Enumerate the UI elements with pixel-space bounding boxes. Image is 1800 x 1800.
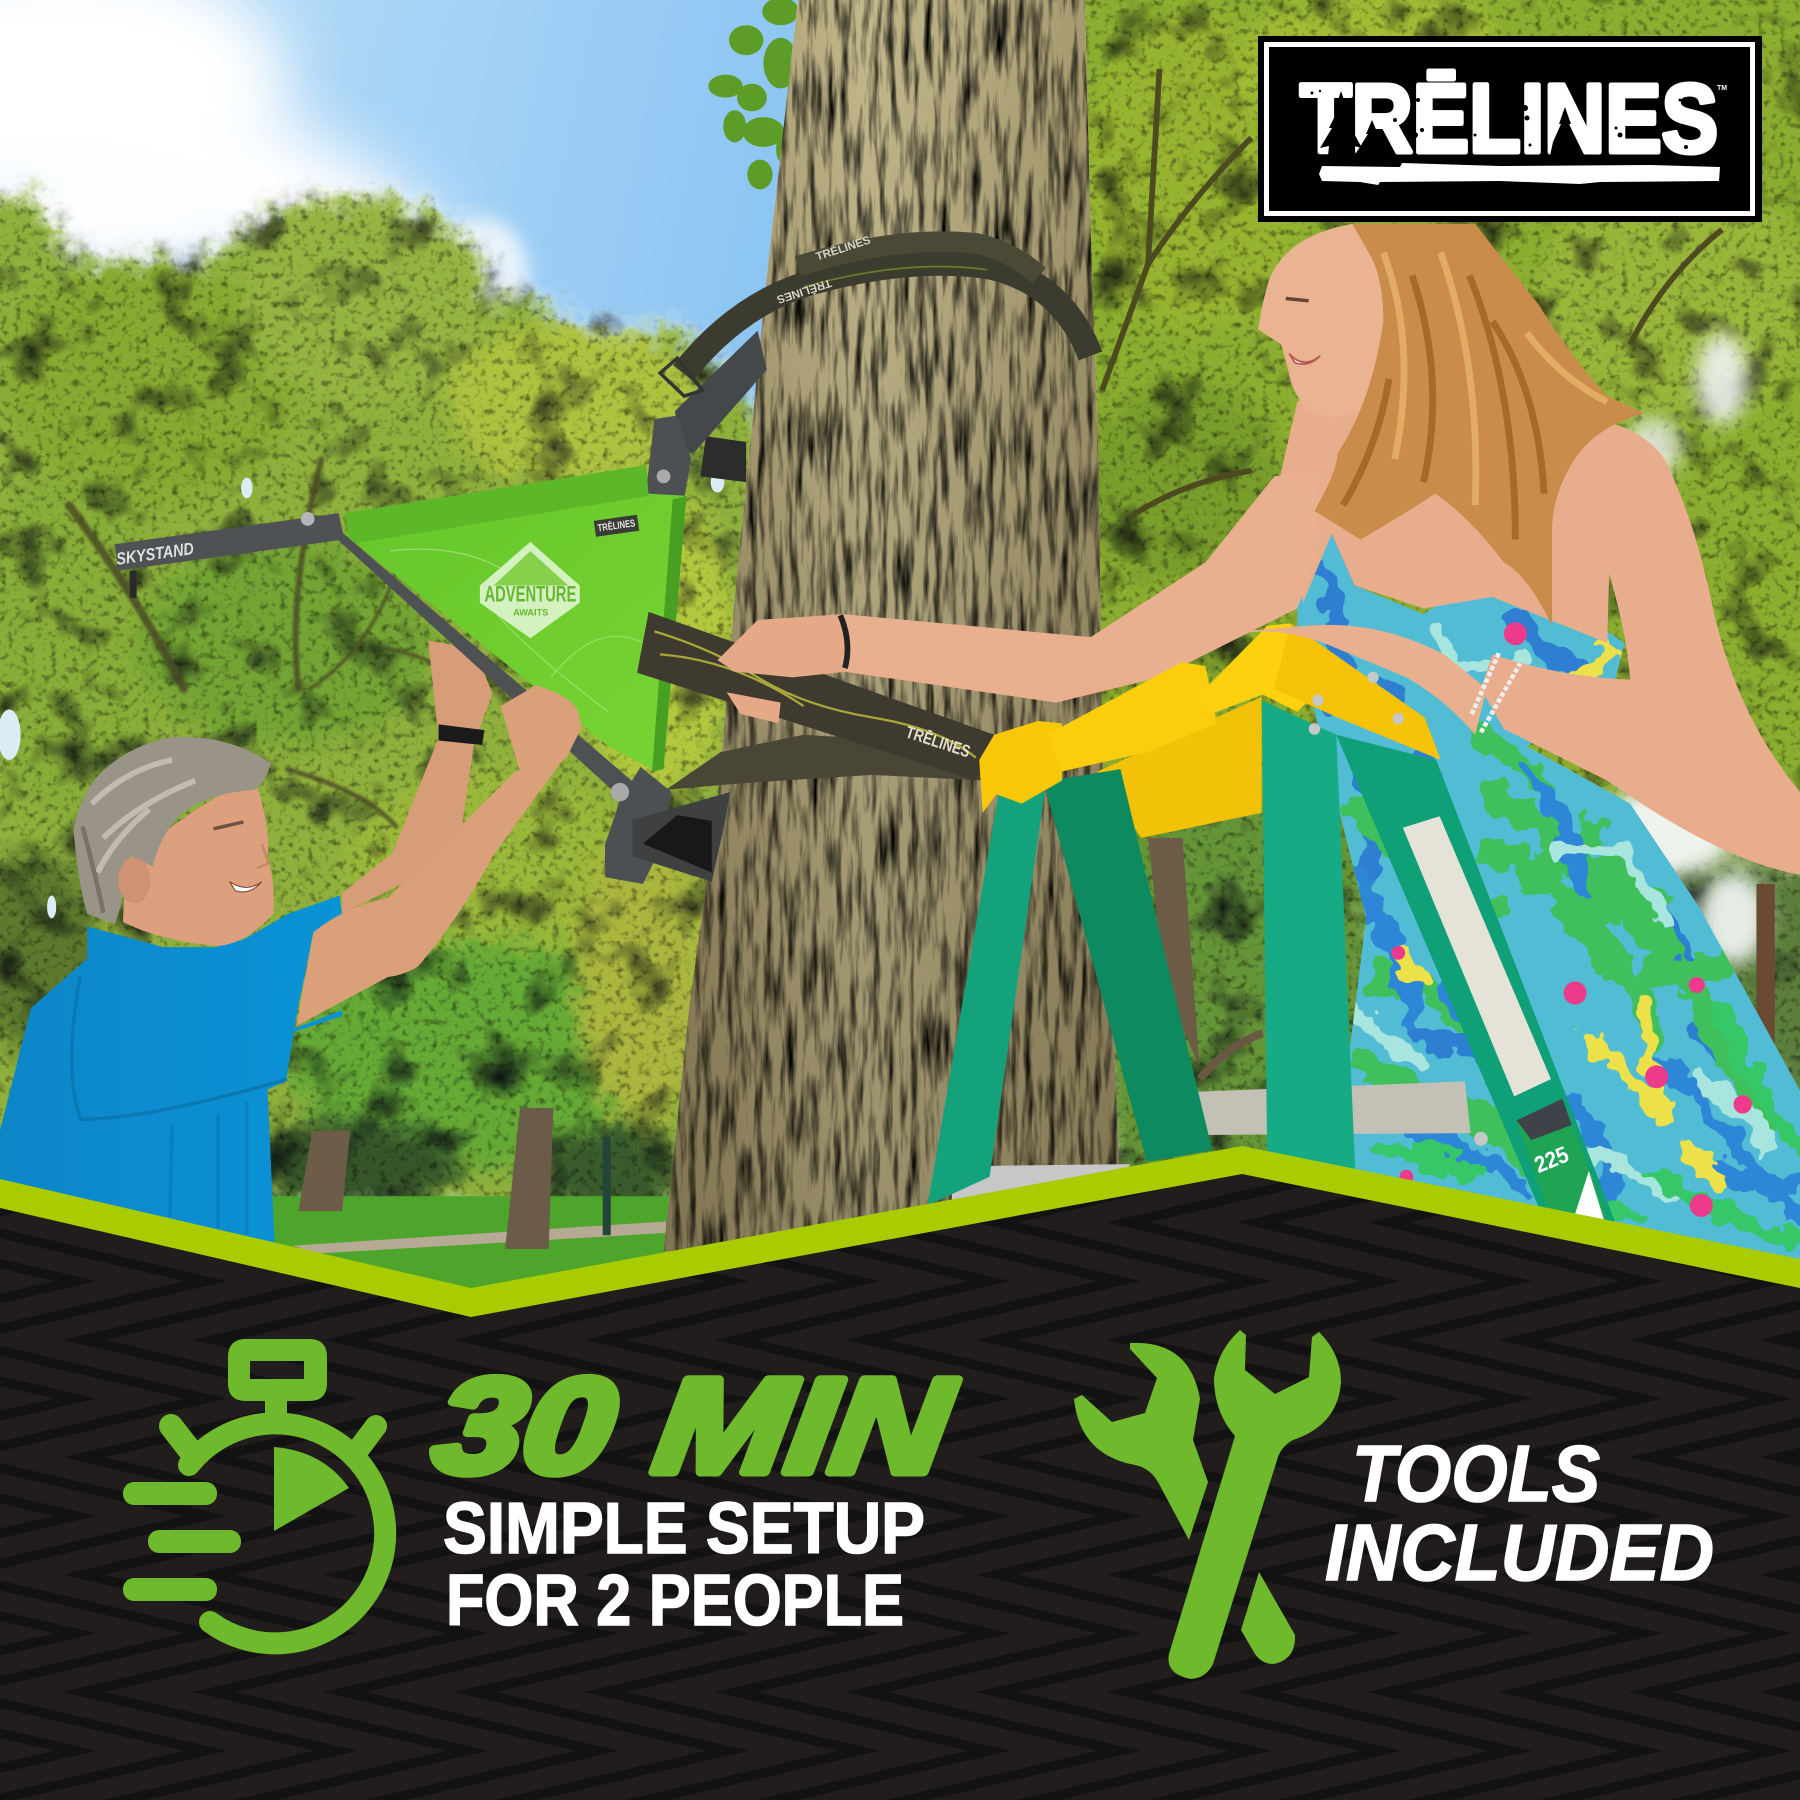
warning label	[1403, 816, 1551, 1096]
man's head	[73, 737, 274, 946]
upper tree strap: TRĒLINES	[815, 234, 873, 263]
park lawn and trunks	[270, 1108, 672, 1300]
logo trademark: TM	[1717, 85, 1727, 92]
lower metal bracket	[605, 767, 730, 884]
stand top bar: SKYSTAND	[115, 538, 195, 569]
watch	[439, 724, 484, 745]
woman's dress with tropical print	[1297, 534, 1800, 1259]
stand top bar	[115, 513, 344, 598]
woman's hand on ladder	[1240, 625, 1520, 735]
text: tools included: INCLUDED	[1325, 1508, 1714, 1597]
text: tools included	[1325, 1429, 1714, 1597]
photo: two people hanging a tree stand	[0, 0, 1800, 1300]
text: tools included: TOOLS	[1352, 1429, 1600, 1518]
logo: Trelines	[1258, 36, 1762, 222]
leaves on trunk edge	[708, 0, 799, 189]
text: simple setup for 2 people: SIMPLE SETUP	[443, 1489, 925, 1569]
ladder rivets	[1309, 672, 1488, 1146]
ladder rail rear	[1044, 769, 1212, 1162]
logo wordmark: TRĒLINES	[1300, 64, 1718, 173]
left branches and sky gaps	[0, 459, 724, 918]
step ladder	[928, 623, 1618, 1234]
green hammock seat: TRĒLINES	[597, 517, 636, 534]
heading: 30 min: 30 MIN	[426, 1351, 962, 1501]
green hammock seat	[344, 465, 687, 771]
left background trees	[0, 189, 792, 1217]
lower tree strap	[666, 735, 987, 790]
tree trunk with bark	[664, 0, 1119, 1251]
adventure awaits badge: AWAITS	[513, 607, 548, 617]
upper tree strap	[683, 234, 1091, 373]
text: simple setup for 2 people	[443, 1489, 925, 1641]
dark chevron panel	[0, 1174, 1800, 1800]
right background base	[1068, 0, 1800, 1286]
ladder rail centre	[1262, 700, 1356, 1182]
woman's body and arms	[718, 367, 1800, 875]
man's shirt	[0, 895, 342, 1263]
capacity sticker	[1517, 1099, 1607, 1234]
lower aluminium step	[952, 1164, 1130, 1205]
logo log underline	[1319, 163, 1720, 185]
ladder rail left	[928, 792, 1045, 1205]
upper tree strap: TRĒLINES	[775, 276, 833, 305]
adventure awaits badge: ADVENTURE	[484, 582, 576, 607]
sky with clouds	[0, 0, 1800, 1286]
ladder rail right	[1336, 735, 1618, 1228]
icon: crossed wrenches	[1074, 1330, 1341, 1679]
logo pine trees	[1320, 91, 1582, 156]
text: simple setup for 2 people: FOR 2 PEOPLE	[446, 1561, 904, 1641]
man's front hand	[501, 685, 582, 771]
adventure awaits badge	[480, 542, 580, 638]
stand diagonal bar	[301, 512, 638, 801]
man's front arm	[296, 755, 566, 1026]
man's rear arm	[342, 641, 492, 914]
right sky gaps and branches	[1102, 69, 1775, 1079]
right background trees	[1068, 0, 1800, 1217]
capacity sticker: 225	[1530, 1141, 1572, 1178]
strap held by woman: TRĒLINES	[903, 722, 973, 761]
upper metal bracket	[645, 331, 767, 505]
strap held by woman	[637, 612, 994, 781]
yellow ladder top	[979, 623, 1441, 813]
logo distress speckles	[1310, 88, 1714, 149]
lime green band	[0, 1146, 1800, 1340]
icon: stopwatch	[123, 1339, 385, 1643]
woman's head and hair	[1258, 224, 1644, 626]
yellow rear panel	[1097, 697, 1262, 838]
rear aluminium step	[1135, 1081, 1471, 1135]
